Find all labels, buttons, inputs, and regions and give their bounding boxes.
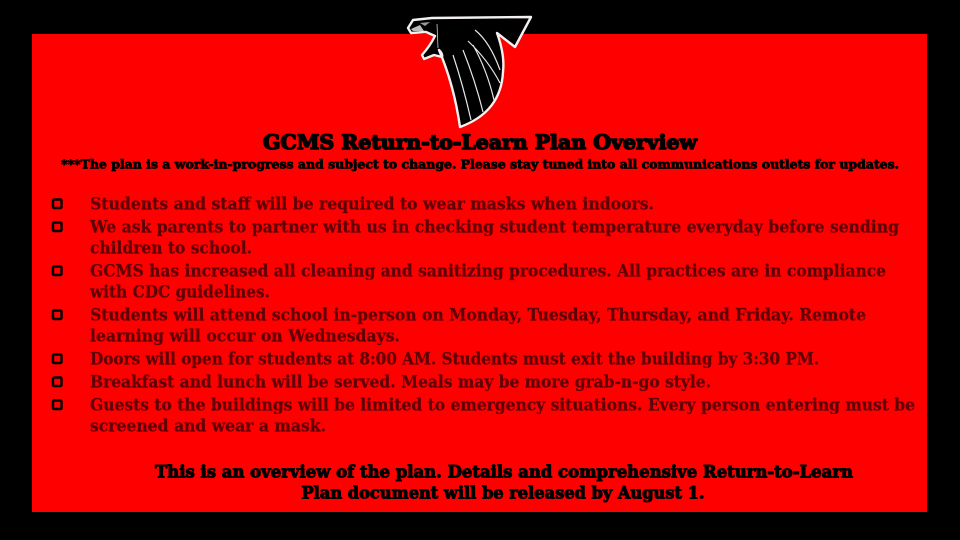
- bullet item: meals: Breakfast and lunch will be served. Meals may be more grab-n-go style.: [90, 372, 711, 392]
- icon: falcon logo: [408, 17, 531, 127]
- bullet item: schedule: Students will attend school in-person on Monday, Tuesday, Thursday, and Friday. Remote: [90, 306, 866, 324]
- title: GCMS Return-to-Learn Plan Overview: [263, 130, 698, 154]
- bullet item: guests: [53, 396, 915, 436]
- bullet item: guests: screened and wear a mask.: [90, 416, 326, 436]
- bullet item: cleaning: with CDC guidelines.: [89, 282, 270, 302]
- bullet item: temperature: We ask parents to partner with us in checking student temperature everyday before sending: [89, 218, 899, 236]
- bullet item: schedule: learning will occur on Wednesdays.: [90, 326, 400, 346]
- bullet item: temperature: [53, 218, 899, 258]
- bullet item: cleaning: [53, 262, 886, 302]
- closing note: Plan document will be released by August 1.: [302, 484, 704, 502]
- closing note: This is an overview of the plan. Details and comprehensive Return-to-Learn: [155, 462, 853, 482]
- bullet item: doors: Doors will open for students at 8:00 AM. Students must exit the building by 3:30 PM.: [90, 350, 819, 368]
- bullet list: [53, 194, 915, 436]
- subtitle note: ***The plan is a work-in-progress and subject to change. Please stay tuned into all communications outlets for updates.: [61, 156, 899, 172]
- bullet item: schedule: [53, 306, 866, 346]
- closing note: [155, 462, 853, 502]
- bullet item: guests: Guests to the buildings will be limited to emergency situations. Every person entering must be: [90, 396, 915, 414]
- bullet item: cleaning: GCMS has increased all cleaning and sanitizing procedures. All practices are in compliance: [90, 262, 886, 280]
- bullet item: masks: Students and staff will be required to wear masks when indoors.: [90, 194, 654, 214]
- bullet item: temperature: children to school.: [90, 238, 252, 258]
